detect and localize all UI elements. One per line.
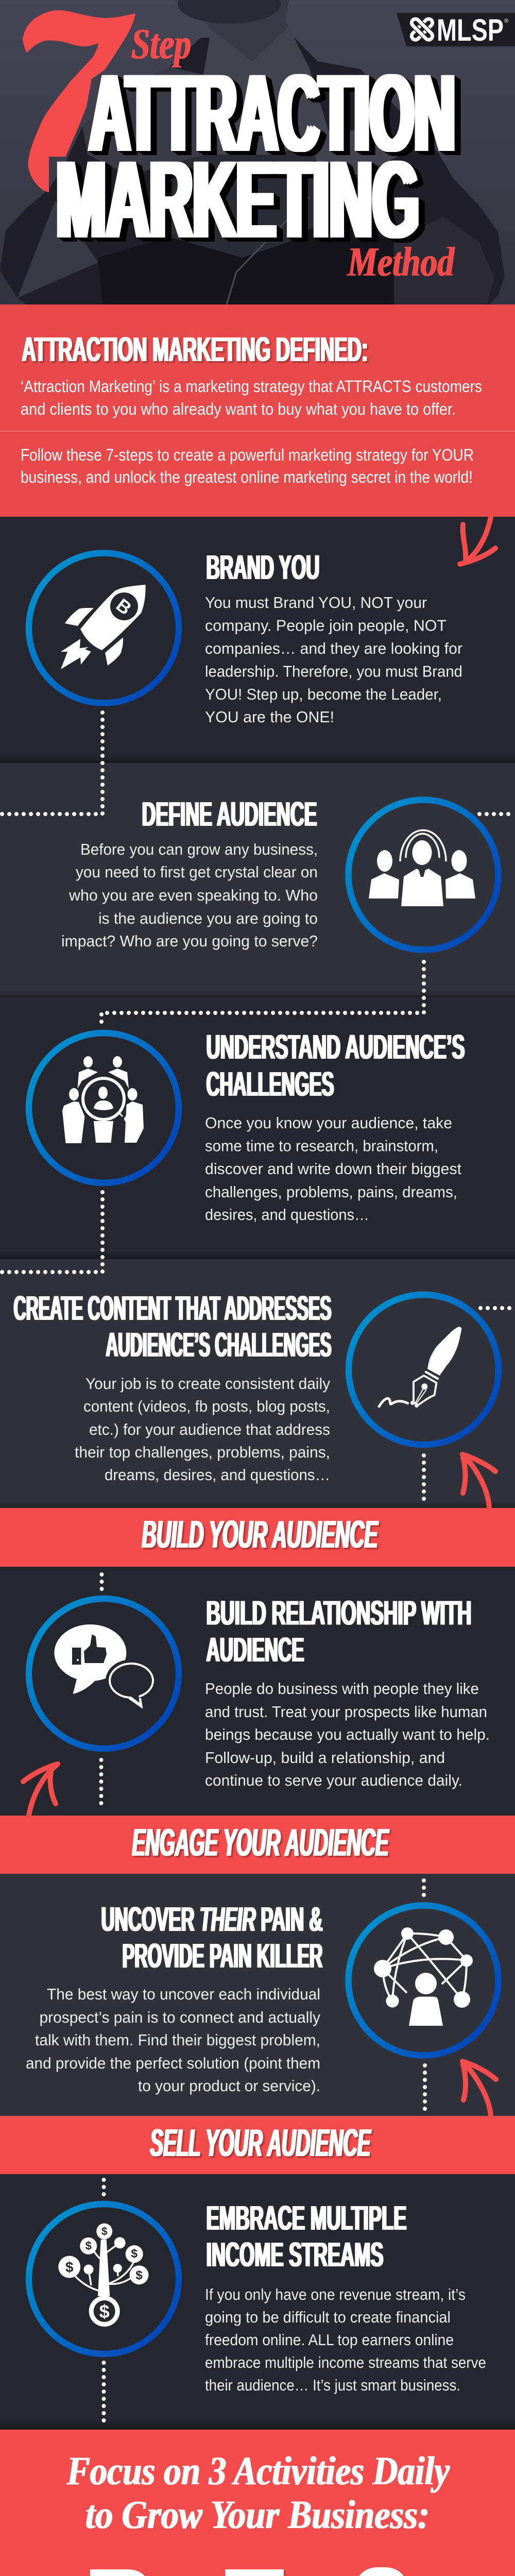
heading: uncover their pain: PROVIDE PAIN KILLER	[122, 1937, 322, 1975]
heading: uncover their pain: UNCOVER THEIR PAIN &	[100, 1900, 322, 1939]
script word Step: Step	[131, 20, 191, 68]
body text: build relationship	[205, 1680, 490, 1789]
icon: audience in ring	[348, 800, 499, 950]
banner: engage your audience	[0, 1816, 515, 1874]
dotted connector: around circle 7	[102, 2180, 106, 2421]
body text: build relationship: beings because you actually want to help.	[205, 1725, 490, 1743]
body text: build relationship: continue to serve your audience daily.	[205, 1771, 462, 1789]
body text: build relationship: and trust. Treat your prospects like human	[205, 1703, 487, 1721]
body text: brand you	[205, 594, 462, 726]
panel: step 6 uncover pain	[0, 1874, 515, 2116]
panel: step 5 build relationship	[0, 1567, 515, 1816]
body text: income streams: If you only have one revenue stream, it’s	[205, 2285, 466, 2303]
body text: uncover pain: prospect’s pain is to connect and actually	[39, 2008, 320, 2026]
body text: define audience	[61, 840, 318, 950]
heading: create content	[13, 1289, 331, 1364]
arrow: pointing up	[462, 2061, 496, 2116]
banner: sell your audience	[0, 2116, 515, 2174]
body text: brand you: company. People join people, NOT	[205, 616, 447, 635]
body text: brand you: YOU are the ONE!	[205, 708, 334, 726]
dotted connector: around circle 5	[101, 1574, 102, 1804]
body text: understand challenges: challenges, problems, pains, dreams,	[205, 1183, 457, 1201]
icon: money tree in ring: $	[85, 2239, 92, 2252]
icon: money tree in ring: $	[65, 2259, 74, 2275]
hero photo: man opening his jacket	[0, 0, 515, 304]
heading: brand you: BRAND YOU	[205, 548, 319, 587]
panel: focus on 3 activities	[0, 2430, 515, 2576]
intro text	[21, 446, 474, 486]
body text: understand challenges: discover and write down their biggest	[205, 1160, 461, 1178]
icon: people under magnifier in ring	[29, 1033, 179, 1183]
body text: uncover pain: to your product or service).	[138, 2077, 320, 2095]
body text: uncover pain: and provide the perfect solution (point them	[26, 2054, 320, 2072]
definition text: and clients to you who already want to buy what you have to offer.	[21, 400, 456, 418]
icon: money tree in ring: $	[135, 2268, 143, 2282]
panel: attraction marketing defined	[0, 304, 515, 517]
body text: uncover pain: The best way to uncover each individual	[47, 1985, 320, 2003]
body text: uncover pain: talk with them. Find their biggest problem,	[35, 2031, 320, 2049]
icon: money tree in ring: $	[99, 2301, 110, 2322]
body text: uncover pain	[26, 1985, 320, 2095]
body text: create content: dreams, desires, and questions…	[105, 1466, 330, 1484]
body text: understand challenges: Once you know your audience, take	[205, 1114, 452, 1132]
body text: brand you: leadership. Therefore, you must Brand	[205, 663, 462, 680]
big red numeral 7	[23, 10, 135, 192]
hero panel	[0, 0, 515, 304]
dotted connector: circle 4 to banner	[422, 1455, 426, 1500]
heading: understand audience's challenges	[205, 1028, 464, 1104]
heading: focus on 3 activities daily: to Grow Your Business:	[85, 2492, 429, 2537]
heading: focus on 3 activities daily	[66, 2448, 449, 2537]
heading: understand audience's challenges: CHALLENGES	[205, 1065, 333, 1104]
panel: step 4 create content	[0, 1259, 515, 1508]
icon: person under network in ring	[348, 1905, 499, 2056]
body text: brand you: You must Brand YOU, NOT your	[205, 594, 427, 612]
body text: define audience: who you are even speaking to. Who	[68, 886, 318, 904]
dotted connector: around circle 6	[424, 1880, 425, 2110]
body text: create content: etc.) for your audience that address	[89, 1420, 330, 1438]
icon: fountain pen in ring	[349, 1295, 499, 1445]
dotted connector: circle 3 to circle 4	[2, 1192, 512, 1308]
body text: income streams: embrace multiple income streams that serve	[205, 2353, 486, 2371]
heading: define audience: DEFINE AUDIENCE	[141, 795, 316, 834]
big letters B-E-S	[83, 2524, 411, 2576]
icon: rocket in ring: B	[112, 594, 136, 619]
body text: build relationship: Follow-up, build a relationship, and	[205, 1749, 445, 1767]
panel: step 2 define audience	[0, 763, 515, 997]
heading: embrace multiple income streams	[205, 2199, 406, 2274]
icon: money tree in ring	[29, 2204, 179, 2354]
heading: focus on 3 activities daily: Focus on 3 Activities Daily	[66, 2448, 449, 2493]
heading: uncover their pain	[100, 1900, 322, 1975]
panel: step 1 brand you	[0, 517, 515, 763]
body text: brand you: YOU! Step up, become the Leader,	[205, 685, 442, 703]
arrow: pointing up	[462, 1454, 495, 1508]
body text: define audience: impact? Who are you going to serve?	[61, 932, 318, 950]
icon: chat bubbles in ring	[29, 1599, 179, 1749]
icon: money tree in ring: $	[131, 2247, 138, 2260]
body text: create content	[75, 1375, 330, 1484]
body text: understand challenges: some time to research, brainstorm,	[205, 1137, 438, 1155]
MLSP logo badge	[397, 13, 515, 47]
arrow: pointing down	[460, 517, 495, 564]
body text: brand you: companies… and they are looking for	[205, 639, 462, 657]
heading: build relationship	[205, 1594, 471, 1669]
body text: income streams: their audience… It’s just smart business.	[205, 2376, 460, 2394]
body text: build relationship: People do business with people they like	[205, 1680, 479, 1698]
body text: define audience: you need to first get crystal clear on	[76, 863, 318, 881]
body text: income streams: freedom online. ALL top earners online	[205, 2331, 454, 2349]
icon: money tree in ring: $	[101, 2226, 108, 2238]
panel: step 7 multiple income streams	[0, 2174, 515, 2430]
body text: define audience: Before you can grow any business,	[80, 840, 318, 858]
arrow: pointing up	[23, 1764, 58, 1816]
definition text	[21, 377, 482, 418]
dotted connector: circle 1 to circle 2	[2, 713, 512, 814]
body text: create content: their top challenges, problems, pains,	[75, 1443, 330, 1461]
heading: embrace multiple income streams: INCOME STREAMS	[205, 2235, 383, 2274]
body text: understand challenges: desires, and questions…	[205, 1206, 369, 1224]
body text: define audience: is the audience you are going to	[98, 909, 318, 927]
MLSP logo badge: ®	[504, 18, 508, 24]
icon: rocket in ring	[29, 553, 179, 703]
heading: build relationship: AUDIENCE	[205, 1631, 303, 1669]
panel: step 3 understand challenges	[0, 997, 515, 1259]
script word Method: Method	[346, 240, 454, 285]
body text: create content: Your job is to create consistent daily	[85, 1375, 330, 1393]
body text: create content: content (videos, fb posts, blog posts,	[83, 1397, 330, 1415]
dotted connector: circle 2 to circle 3	[101, 962, 424, 1022]
body text: income streams	[205, 2285, 486, 2394]
body text: understand challenges	[205, 1114, 461, 1224]
body text: income streams: going to be difficult to create financial	[205, 2308, 451, 2326]
banner: build your audience	[0, 1508, 515, 1567]
